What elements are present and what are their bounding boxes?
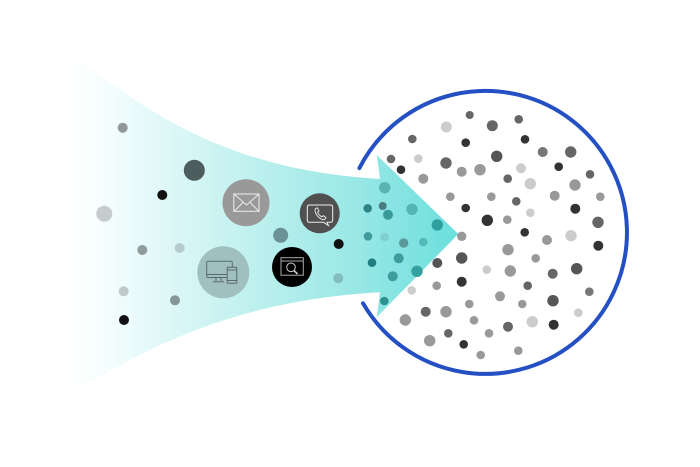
icon: desktop and mobile devices: [197, 246, 249, 298]
icon: phone speech bubble: [300, 193, 340, 233]
teal dots inside the arrow head: [363, 182, 443, 305]
icon: browser search: [272, 247, 312, 287]
scattered dots before the arrow: [96, 123, 344, 325]
target circle outline: [359, 91, 627, 374]
icon: email envelope: [222, 179, 270, 226]
funnel arrow: [72, 54, 458, 393]
grey dots inside the circle: [387, 111, 605, 359]
